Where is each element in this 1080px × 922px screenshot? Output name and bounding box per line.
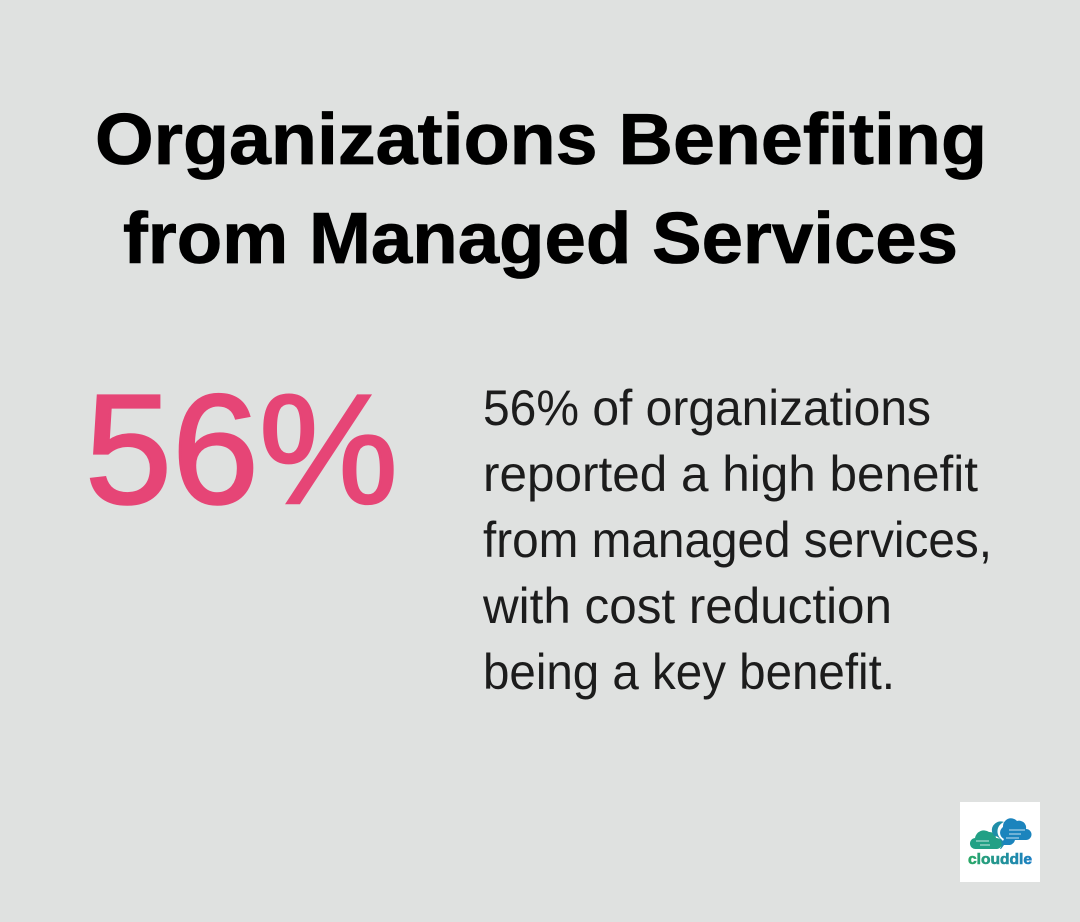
big statistic: 56%: 56%	[85, 363, 398, 537]
description text: from managed services,	[483, 512, 992, 568]
icon: clouds	[970, 818, 1032, 849]
logo: clouddle	[960, 802, 1040, 882]
description text: being a key benefit.	[483, 644, 895, 700]
description text: reported a high benefit	[483, 446, 978, 502]
title: Organizations Benefiting	[95, 100, 987, 180]
description text: 56% of organizations	[483, 380, 931, 436]
description text: with cost reduction	[482, 578, 892, 634]
title: from Managed Services	[123, 199, 958, 279]
logo wordmark: clouddle	[968, 851, 1032, 868]
description text	[482, 380, 992, 700]
title	[95, 100, 987, 279]
